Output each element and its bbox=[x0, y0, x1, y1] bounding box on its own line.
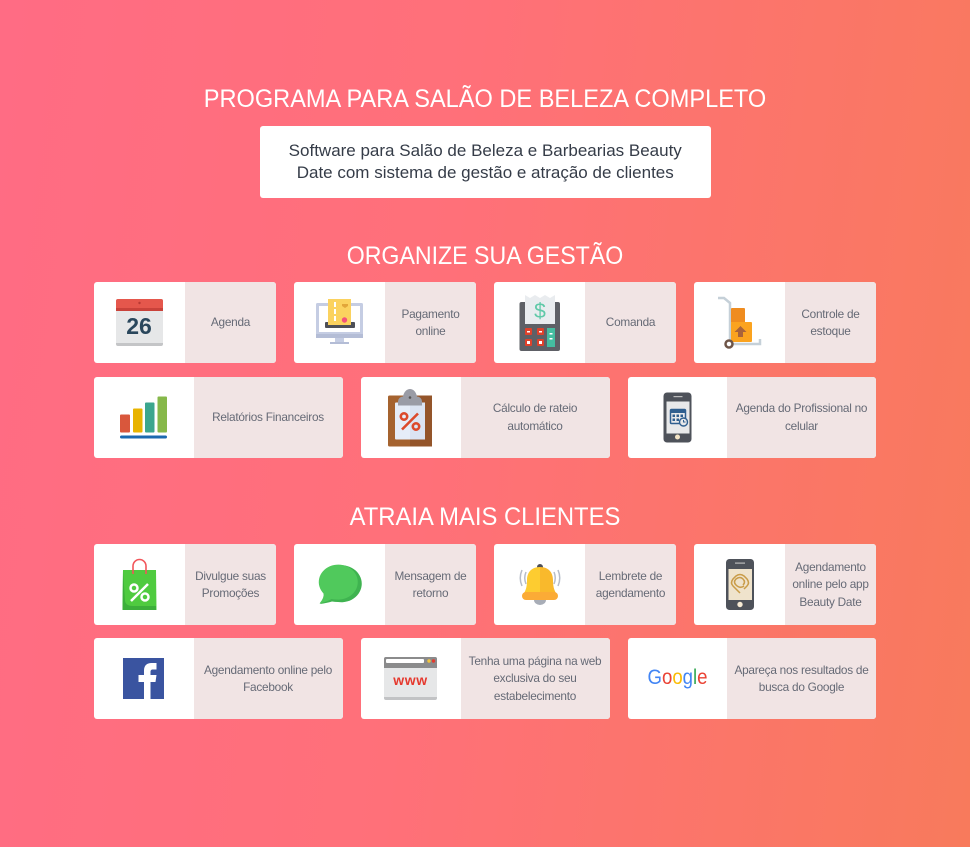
label: Comanda bbox=[606, 315, 655, 329]
label bbox=[185, 282, 276, 363]
icon: speech bubble bbox=[318, 564, 362, 604]
label bbox=[385, 544, 476, 625]
icon: clipboard percent bbox=[388, 389, 432, 446]
subtitle box bbox=[260, 126, 711, 198]
icon: cash register bbox=[520, 295, 560, 351]
card: google bbox=[628, 638, 876, 719]
icon: calendar bbox=[116, 299, 163, 346]
card: estoque bbox=[694, 282, 876, 363]
label: online bbox=[416, 324, 446, 338]
label bbox=[785, 282, 876, 363]
icon: browser www bbox=[384, 657, 437, 700]
icon: bell bbox=[520, 564, 560, 605]
icon: phone app bbox=[726, 559, 754, 610]
icon: phone calendar bbox=[664, 392, 692, 442]
label: retorno bbox=[413, 586, 448, 600]
label: Agendamento online pelo bbox=[204, 663, 332, 677]
label bbox=[185, 544, 276, 625]
label: celular bbox=[785, 418, 818, 432]
card: app bbox=[694, 544, 876, 625]
label: Divulgue suas bbox=[195, 569, 266, 583]
label: Agendamento bbox=[795, 560, 866, 574]
label bbox=[460, 376, 610, 458]
label bbox=[785, 544, 876, 625]
icon: google logo: Google bbox=[647, 666, 707, 689]
label: Pagamento bbox=[401, 307, 460, 321]
card: lembrete bbox=[494, 544, 676, 625]
icon: card in monitor bbox=[316, 299, 363, 344]
label: Facebook bbox=[243, 680, 293, 694]
icon: bar chart bbox=[120, 396, 167, 438]
label: estoque bbox=[810, 324, 851, 338]
label: online pelo app bbox=[792, 577, 869, 591]
card: promocoes bbox=[94, 544, 276, 625]
icon: facebook bbox=[123, 658, 164, 699]
icon: hand truck bbox=[718, 296, 762, 349]
card: rateio bbox=[361, 376, 610, 458]
card: agenda celular bbox=[628, 376, 876, 458]
label bbox=[585, 544, 676, 625]
icon: cash register: $ bbox=[534, 300, 546, 323]
label: Controle de bbox=[801, 307, 860, 321]
card: agenda bbox=[94, 282, 276, 363]
subtitle box: Software para Salão de Beleza e Barbearias Beauty bbox=[289, 140, 682, 160]
label: agendamento bbox=[596, 586, 665, 600]
icon: browser www: www bbox=[392, 672, 428, 688]
label bbox=[727, 638, 876, 719]
card: pagamento bbox=[294, 282, 476, 363]
label: estabelecimento bbox=[494, 689, 576, 703]
icon: calendar: 26 bbox=[126, 313, 152, 339]
label: Tenha uma página na web bbox=[469, 654, 601, 668]
label: Mensagem de bbox=[394, 569, 466, 583]
label: Cálculo de rateio bbox=[493, 401, 577, 415]
card: pagina web bbox=[361, 638, 610, 719]
card: mensagem bbox=[294, 544, 476, 625]
label bbox=[385, 282, 476, 363]
label: automático bbox=[507, 418, 563, 432]
label: Relatórios Financeiros bbox=[212, 410, 324, 424]
label bbox=[194, 638, 342, 719]
label bbox=[194, 376, 342, 458]
label: busca do Google bbox=[759, 680, 844, 694]
card: facebook bbox=[94, 638, 342, 719]
label: exclusiva do seu bbox=[493, 671, 577, 685]
label bbox=[460, 638, 610, 719]
label: Promoções bbox=[202, 586, 259, 600]
card: comanda bbox=[494, 282, 676, 363]
label bbox=[727, 376, 876, 458]
label: Agenda do Profissional no bbox=[736, 401, 867, 415]
card: relatorios bbox=[94, 376, 342, 458]
heading: clients: ATRAIA MAIS CLIENTES bbox=[350, 503, 620, 531]
label: Apareça nos resultados de bbox=[734, 663, 869, 677]
label: Beauty Date bbox=[799, 595, 862, 609]
subtitle box: Date com sistema de gestão e atração de clientes bbox=[297, 163, 674, 182]
label bbox=[585, 282, 676, 363]
label: Lembrete de bbox=[599, 569, 662, 583]
label: Agenda bbox=[211, 315, 250, 329]
title: PROGRAMA PARA SALÃO DE BELEZA COMPLETO bbox=[204, 85, 766, 113]
heading: organize: ORGANIZE SUA GESTÃO bbox=[347, 242, 623, 270]
icon: shopping bag bbox=[122, 558, 156, 610]
